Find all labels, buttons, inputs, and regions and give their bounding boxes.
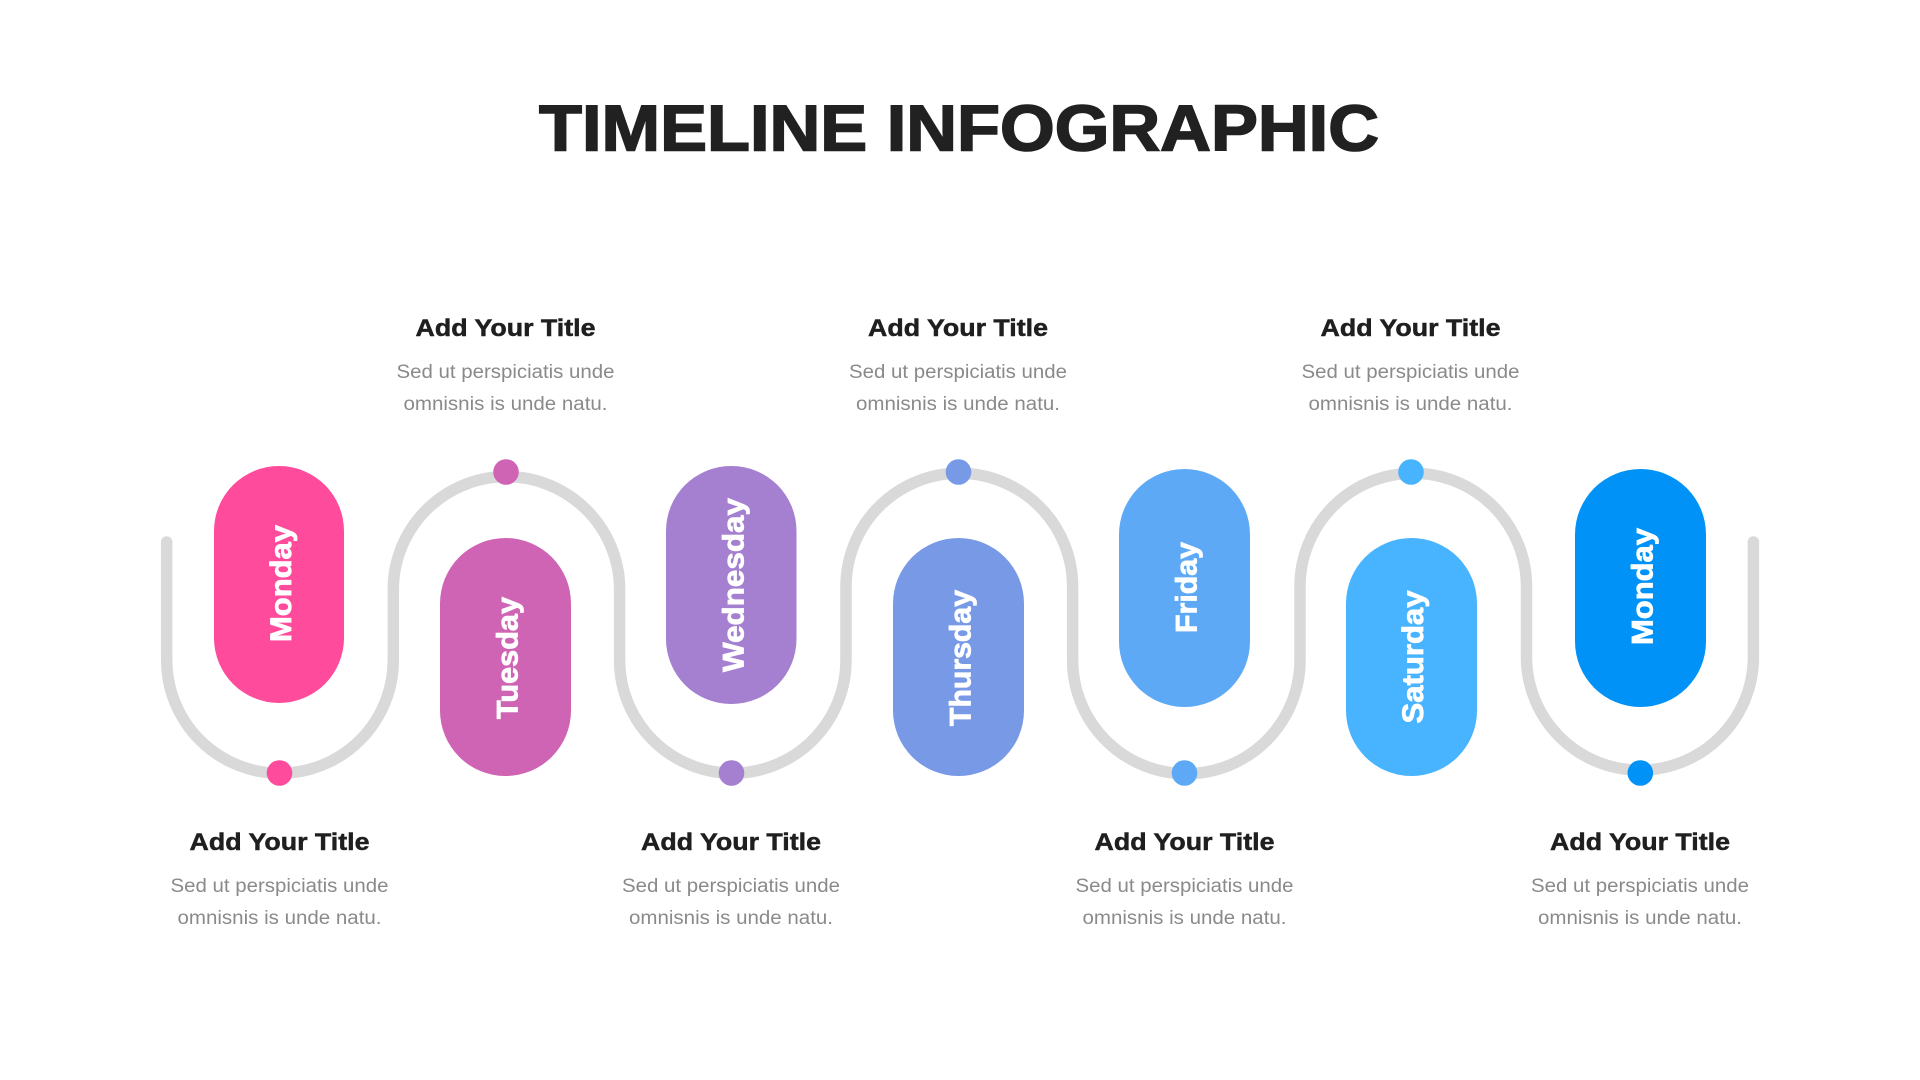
step 6: Saturday (1302, 315, 1520, 776)
heading: final Monday: Add Your Title (1550, 829, 1730, 856)
marker dot: final Monday (1628, 760, 1653, 786)
marker dot: Friday (1172, 760, 1197, 786)
marker dot: Monday (267, 760, 292, 786)
description: Tuesday: Sed ut perspiciatis unde (396, 362, 614, 383)
marker dot: Tuesday (493, 459, 519, 485)
description: Monday: Sed ut perspiciatis unde (170, 876, 388, 897)
serpentine timeline track (167, 473, 1753, 774)
pill: Saturday (1346, 538, 1477, 776)
label: Thursday: Thursday (944, 590, 978, 726)
label: final Monday: Monday (1626, 528, 1660, 645)
pill: Friday (1119, 469, 1250, 707)
description: Tuesday: omnisnis is unde natu. (404, 394, 608, 415)
description: Wednesday: Sed ut perspiciatis unde (622, 876, 840, 897)
description: Monday: omnisnis is unde natu. (178, 908, 382, 929)
pill: Thursday (893, 538, 1024, 776)
step 7: Monday (1531, 469, 1749, 929)
heading: Tuesday: Add Your Title (416, 315, 596, 342)
title: TIMELINE INFOGRAPHIC (539, 92, 1379, 164)
step 4: Thursday (849, 315, 1067, 776)
description: Thursday: Sed ut perspiciatis unde (849, 362, 1067, 383)
pill: Monday (214, 466, 344, 703)
description: Wednesday: omnisnis is unde natu. (629, 908, 833, 929)
step 5: Friday (1076, 469, 1294, 929)
heading: Saturday: Add Your Title (1320, 315, 1500, 342)
pill: Wednesday (666, 466, 796, 704)
description: Saturday: omnisnis is unde natu. (1308, 394, 1512, 415)
description: final Monday: omnisnis is unde natu. (1538, 908, 1742, 929)
label: Tuesday: Tuesday (492, 597, 525, 719)
description: Friday: Sed ut perspiciatis unde (1076, 876, 1294, 897)
heading: Monday: Add Your Title (190, 829, 370, 856)
step 2: Tuesday (396, 315, 614, 776)
description: Saturday: Sed ut perspiciatis unde (1302, 362, 1520, 383)
pill: Tuesday (440, 538, 571, 776)
marker dot: Thursday (946, 459, 971, 485)
label: Wednesday: Wednesday (718, 498, 750, 672)
heading: Wednesday: Add Your Title (641, 829, 821, 856)
description: Friday: omnisnis is unde natu. (1082, 908, 1286, 929)
description: final Monday: Sed ut perspiciatis unde (1531, 876, 1749, 897)
pill: final Monday (1575, 469, 1706, 707)
heading: Thursday: Add Your Title (868, 315, 1048, 342)
label: Saturday: Saturday (1397, 590, 1430, 724)
marker dot: Wednesday (719, 760, 744, 786)
heading: Friday: Add Your Title (1094, 829, 1274, 856)
step 1: Monday (170, 466, 388, 929)
label: Monday: Monday (265, 525, 298, 642)
marker dot: Saturday (1398, 459, 1424, 485)
step 3: Wednesday (622, 466, 840, 929)
label: Friday: Friday (1170, 542, 1204, 633)
description: Thursday: omnisnis is unde natu. (856, 394, 1060, 415)
